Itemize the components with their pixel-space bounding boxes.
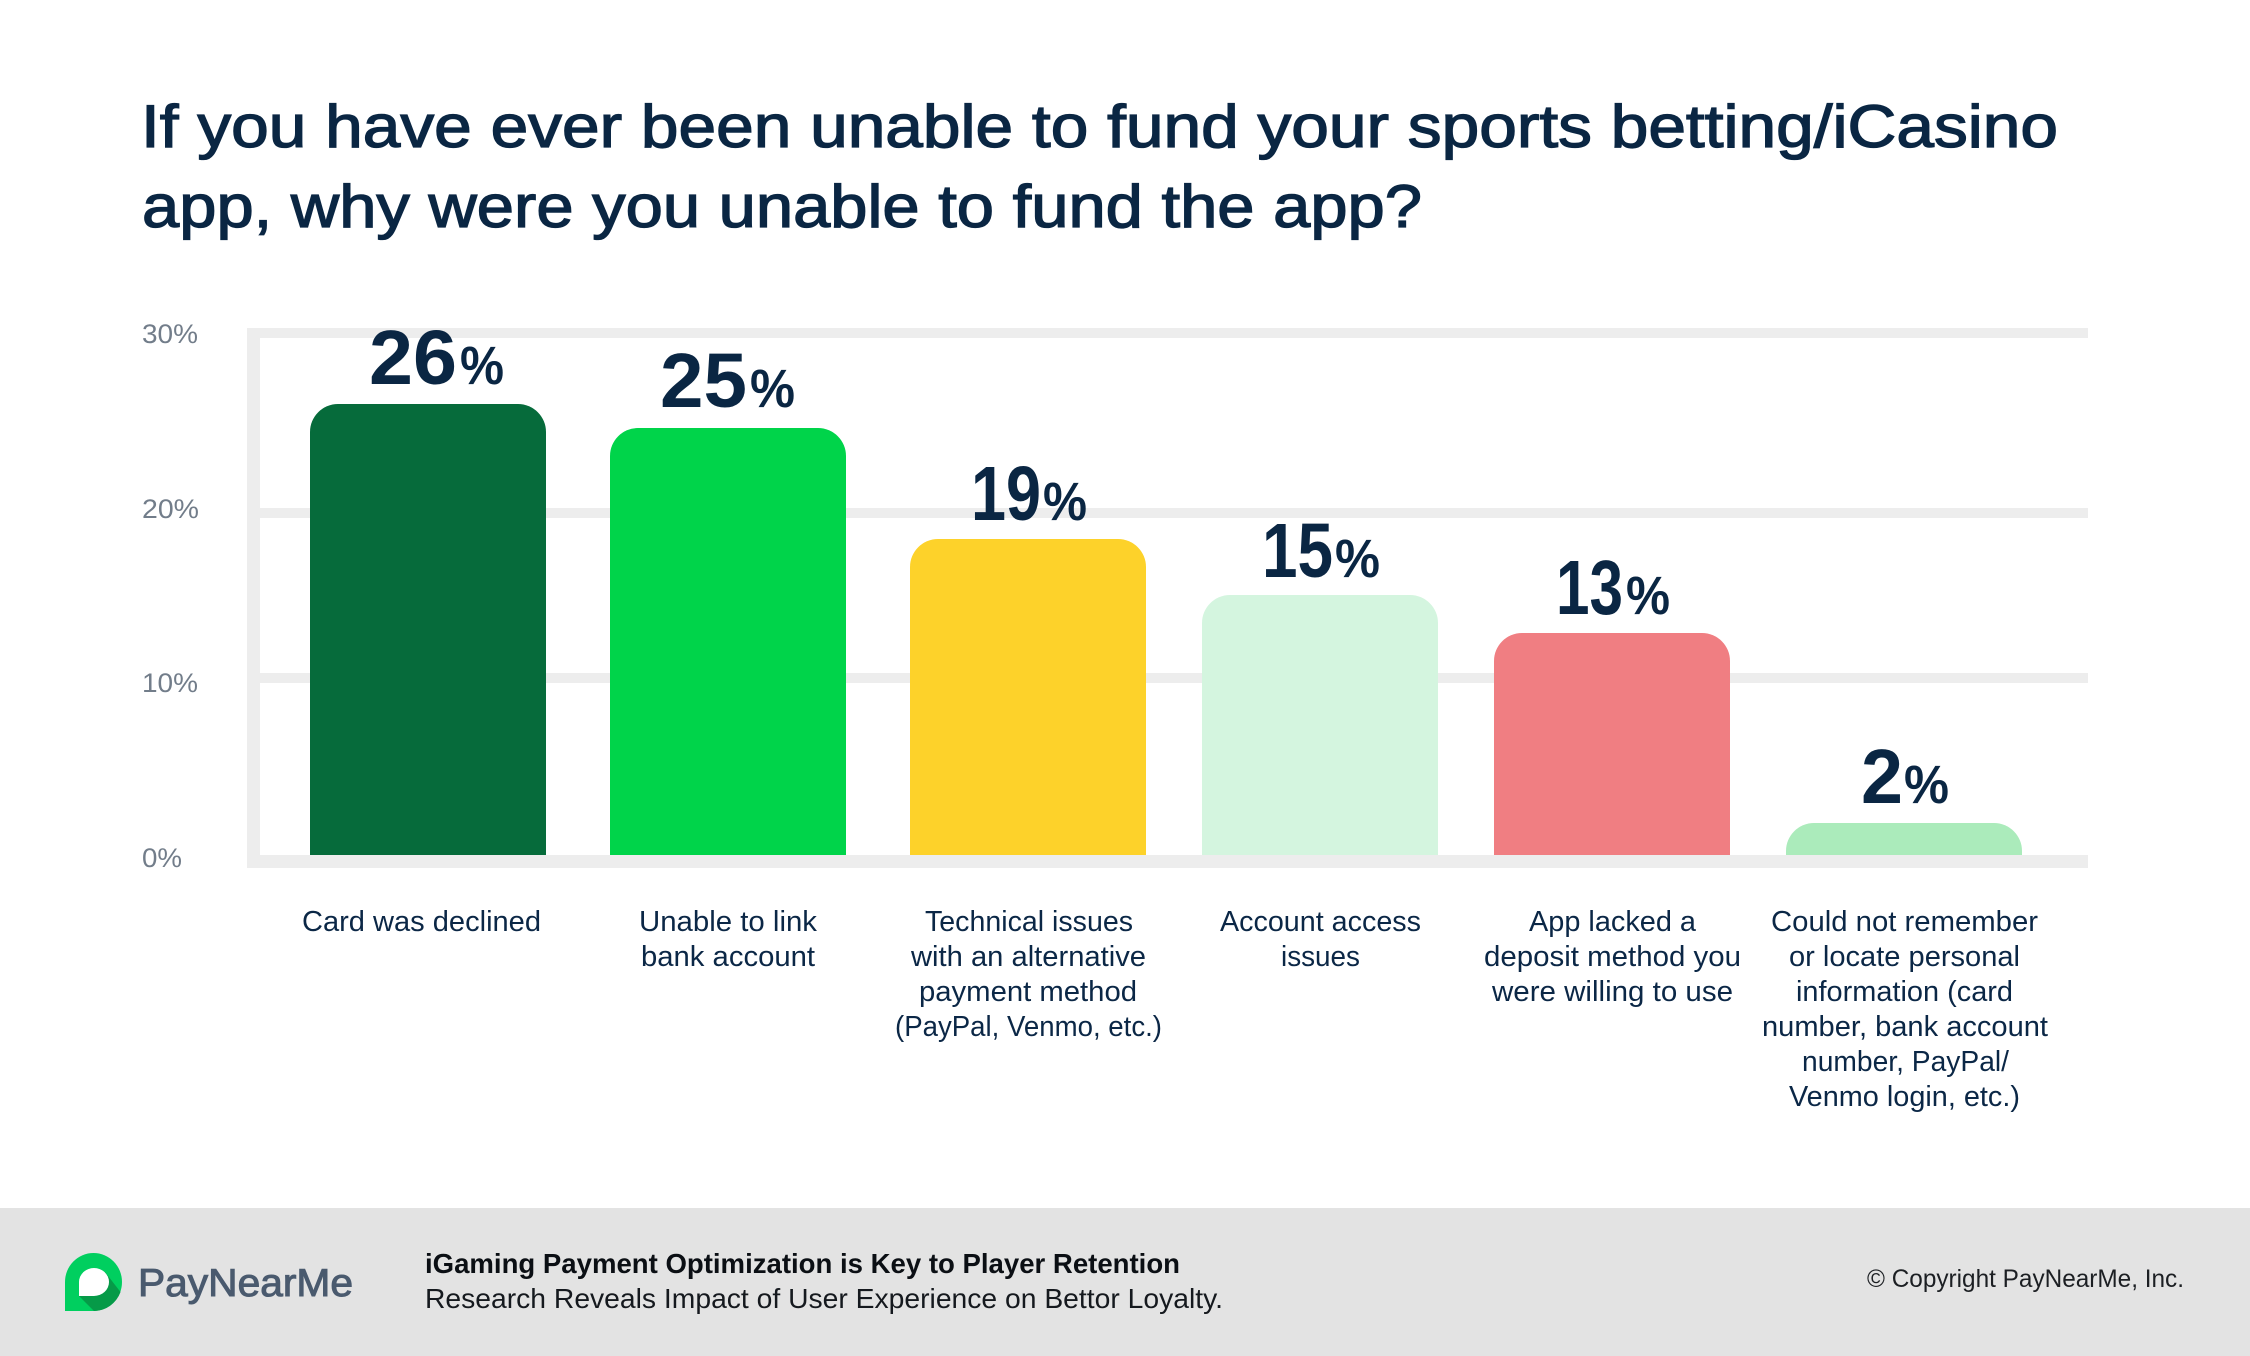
bar: unable to link bank account 25%: % bbox=[750, 359, 795, 419]
bar: app lacked a deposit method 13% bbox=[1484, 545, 1741, 1008]
bar: could not remember personal information 2%: % bbox=[1904, 755, 1949, 815]
bar: app lacked a deposit method 13%: deposit method you bbox=[1484, 941, 1741, 973]
bar: unable to link bank account 25%: Unable to link bbox=[639, 906, 818, 938]
bar: card was declined 26% bbox=[302, 315, 546, 938]
y axis labels: 30% bbox=[142, 319, 198, 349]
bar: account access issues 15%: % bbox=[1335, 529, 1380, 589]
bar: technical issues 19%: (PayPal, Venmo, etc.) bbox=[895, 1011, 1162, 1043]
bar: technical issues 19%: % bbox=[1043, 472, 1087, 532]
footer headline: iGaming Payment Optimization is Key to Player Retention bbox=[425, 1248, 1180, 1279]
bar: unable to link bank account 25%: 25 bbox=[660, 338, 747, 424]
bar: account access issues 15%: 15 bbox=[1262, 508, 1333, 594]
title bbox=[141, 93, 2058, 240]
bar: technical issues 19% bbox=[895, 451, 1162, 1043]
bar: account access issues 15%: issues bbox=[1281, 941, 1360, 973]
y axis labels: 10% bbox=[142, 668, 198, 698]
bar: unable to link bank account 25%: bank account bbox=[641, 941, 815, 973]
title: If you have ever been unable to fund your sports betting/iCasino bbox=[141, 93, 2058, 160]
bar: app lacked a deposit method 13%: were willing to use bbox=[1491, 976, 1733, 1008]
bar: unable to link bank account 25% bbox=[610, 338, 846, 973]
icon: speech-pin mark bbox=[65, 1253, 122, 1311]
footer band bbox=[0, 1208, 2250, 1356]
bar: card was declined 26%: 26 bbox=[369, 315, 457, 401]
bar: technical issues 19%: 19 bbox=[971, 451, 1041, 537]
bar: could not remember personal information 2%: or locate personal bbox=[1789, 941, 2020, 973]
chart grid frame bbox=[247, 328, 2088, 868]
title: app, why were you unable to fund the app? bbox=[142, 173, 1422, 240]
bar: app lacked a deposit method 13%: % bbox=[1626, 566, 1670, 626]
footer subhead: Research Reveals Impact of User Experience on Bettor Loyalty. bbox=[425, 1283, 1223, 1314]
bar: could not remember personal information 2%: number, bank account bbox=[1762, 1011, 2048, 1043]
bar: technical issues 19%: Technical issues bbox=[925, 906, 1133, 938]
y axis labels bbox=[142, 319, 199, 873]
bar: could not remember personal information 2%: information (card bbox=[1796, 976, 2013, 1008]
bar: account access issues 15%: Account access bbox=[1220, 906, 1421, 938]
bar: could not remember personal information 2%: number, PayPal/ bbox=[1802, 1046, 2010, 1078]
bar: card was declined 26%: % bbox=[460, 336, 504, 396]
y axis labels: 0% bbox=[142, 843, 182, 873]
bar: card was declined 26%: Card was declined bbox=[302, 906, 541, 938]
bar: could not remember personal information 2%: Venmo login, etc.) bbox=[1789, 1081, 2020, 1113]
y axis labels: 20% bbox=[142, 494, 199, 524]
logo: PayNearMe bbox=[65, 1253, 353, 1311]
logo: PayNearMe: PayNearMe bbox=[138, 1262, 353, 1305]
bar: could not remember personal information 2%: Could not remember bbox=[1771, 906, 2038, 938]
bar: technical issues 19%: with an alternative bbox=[910, 941, 1146, 973]
bar: could not remember personal information 2%: 2 bbox=[1861, 734, 1903, 820]
bar: app lacked a deposit method 13%: 13 bbox=[1556, 545, 1623, 631]
bar: app lacked a deposit method 13%: App lacked a bbox=[1529, 906, 1697, 938]
bar: account access issues 15% bbox=[1202, 508, 1438, 973]
copyright: © Copyright PayNearMe, Inc. bbox=[1867, 1265, 2184, 1293]
bar: technical issues 19%: payment method bbox=[919, 976, 1137, 1008]
bar: could not remember personal information 2% bbox=[1762, 734, 2048, 1113]
bar chart bbox=[142, 315, 2088, 1113]
